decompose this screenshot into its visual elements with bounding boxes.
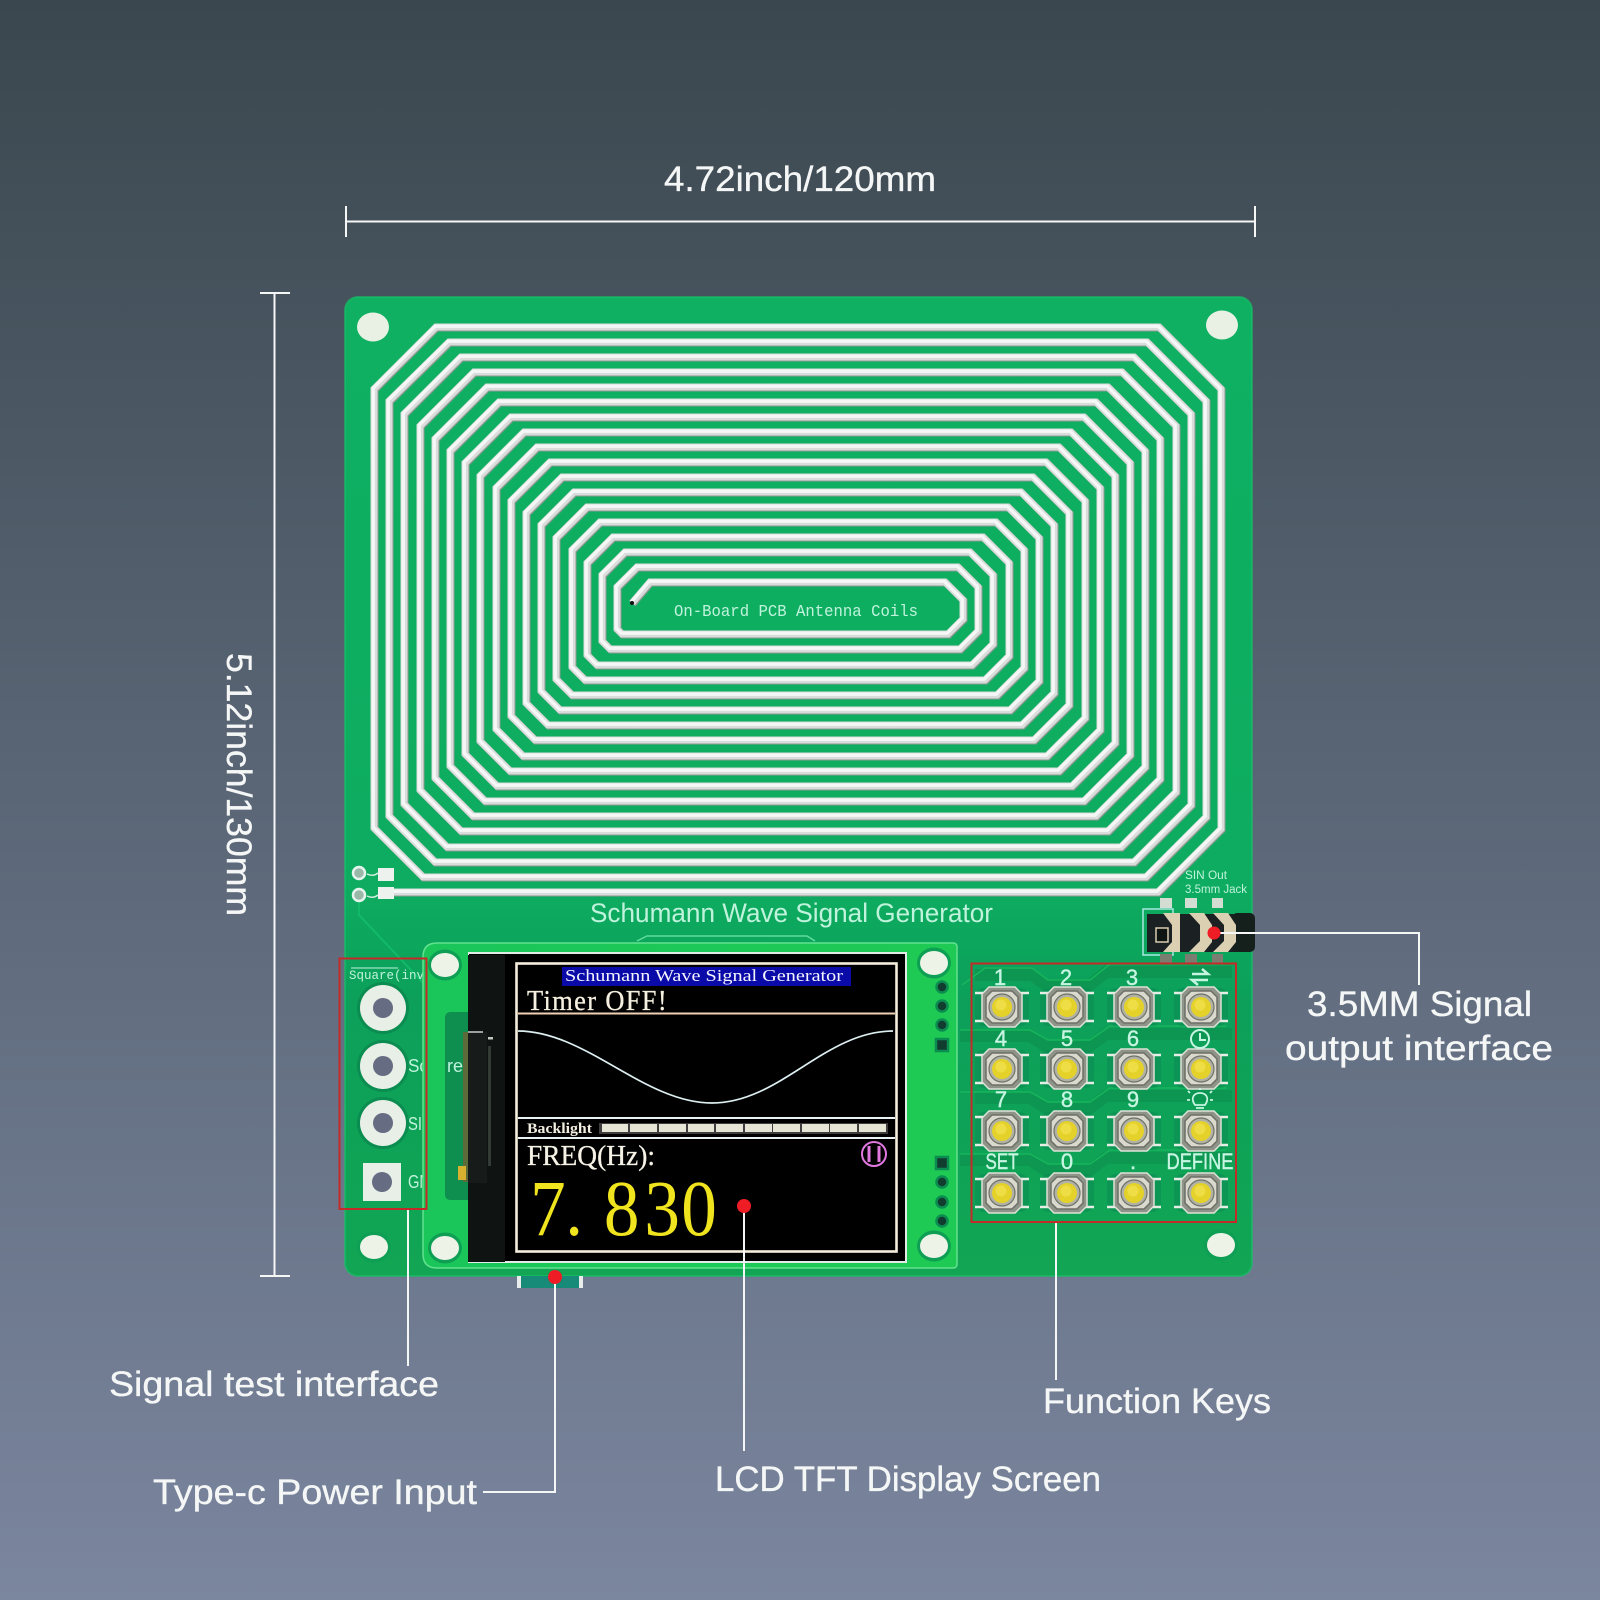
key labels: 7 — [995, 1087, 1007, 1112]
round test pad 1 — [357, 982, 409, 1034]
key labels: SET — [986, 1149, 1018, 1174]
icon: clock — [1191, 1030, 1209, 1048]
key labels: 0 — [1061, 1149, 1073, 1174]
board body — [345, 297, 1252, 1276]
frequency value: 7.830 — [530, 1166, 717, 1253]
timer status: Timer OFF! — [527, 985, 668, 1017]
board title: Schumann Wave Signal Generator — [590, 898, 993, 928]
lcd module — [423, 943, 957, 1268]
jack label: 3.5mm Jack — [1185, 884, 1247, 896]
keypad trace bands — [960, 972, 1232, 1170]
silkscreen outline above display — [637, 936, 815, 941]
board mounting pegs — [357, 310, 1238, 1262]
usb-c connector — [517, 1276, 583, 1288]
test point labels: Square(inv — [349, 969, 424, 983]
width dimension line — [346, 206, 1255, 237]
red highlight box: keys — [972, 964, 1236, 1222]
signal test interface — [349, 968, 430, 1201]
test point labels: GN — [408, 1172, 430, 1192]
callout: signal output — [1208, 926, 1553, 1068]
backlight bar — [599, 1123, 888, 1134]
black display panel — [469, 954, 905, 1261]
square ground pad — [363, 1163, 401, 1201]
key labels: 6 — [1127, 1026, 1139, 1051]
function keypad — [960, 964, 1234, 1213]
3.5mm audio jack — [1143, 898, 1255, 963]
key labels: 5 — [1061, 1026, 1073, 1051]
icon: swap arrows — [1192, 969, 1208, 985]
callout: type-c power input: Type-c Power Input — [153, 1473, 477, 1512]
callout: type-c power input — [153, 1270, 562, 1512]
flex cable window — [445, 1012, 475, 1200]
round test pad 2 — [357, 1040, 409, 1092]
red highlight box: test interface — [340, 958, 426, 1209]
lcd carrier pcb — [423, 943, 957, 1268]
width dimension — [346, 160, 1255, 237]
key labels: . — [1130, 1149, 1136, 1174]
waveform — [518, 1031, 893, 1103]
flex cable window: re — [447, 1056, 463, 1076]
key labels: 8 — [1061, 1087, 1073, 1112]
key labels: 4 — [995, 1026, 1007, 1051]
pause icon — [862, 1142, 886, 1166]
header pin holes — [936, 982, 948, 1226]
callout: signal test interface: Signal test interface — [109, 1365, 439, 1404]
key labels — [986, 965, 1234, 1174]
test point labels: Sc — [408, 1056, 428, 1076]
coil caption: On-Board PCB Antenna Coils — [674, 603, 918, 622]
backlight label: Backlight — [527, 1121, 592, 1137]
key labels: 3 — [1126, 965, 1138, 990]
display glass — [468, 952, 907, 1263]
keypad traces — [960, 964, 1226, 1164]
key labels: DEFINE — [1166, 1149, 1234, 1174]
height dimension label: 5.12inch/130mm — [219, 653, 258, 916]
left ribbon — [468, 955, 505, 1262]
key buttons — [975, 987, 1228, 1213]
key labels: 2 — [1060, 965, 1072, 990]
antenna coil spiral — [373, 326, 1222, 893]
backlight separators — [518, 1118, 895, 1138]
callout: signal output: output interface — [1285, 1029, 1553, 1068]
key labels: 1 — [994, 965, 1006, 990]
callout: function keys: Function Keys — [1043, 1382, 1271, 1421]
coil connection pads — [353, 867, 425, 985]
jack label — [1185, 870, 1247, 896]
lcd carrier pegs — [428, 948, 951, 1264]
height dimension line — [260, 293, 290, 1276]
round test pad 3 — [357, 1097, 409, 1149]
icon: light bulb — [1187, 1088, 1213, 1108]
pcb board — [345, 297, 1255, 1276]
callout: lcd display: LCD TFT Display Screen — [715, 1460, 1101, 1499]
width dimension label: 4.72inch/120mm — [664, 160, 936, 199]
height dimension — [219, 293, 290, 1276]
frequency label: FREQ(Hz): — [527, 1140, 655, 1172]
screen title bar: Schumann Wave Signal Generator — [565, 966, 843, 985]
callout: signal output: 3.5MM Signal — [1307, 985, 1532, 1024]
test point labels — [349, 968, 430, 1192]
key labels: 9 — [1127, 1087, 1139, 1112]
screen frame — [516, 964, 896, 1252]
jack label: SIN Out — [1185, 870, 1228, 882]
test point labels: SI — [408, 1114, 422, 1134]
screen separators — [518, 1012, 895, 1014]
callout: lcd display — [715, 1199, 1101, 1499]
